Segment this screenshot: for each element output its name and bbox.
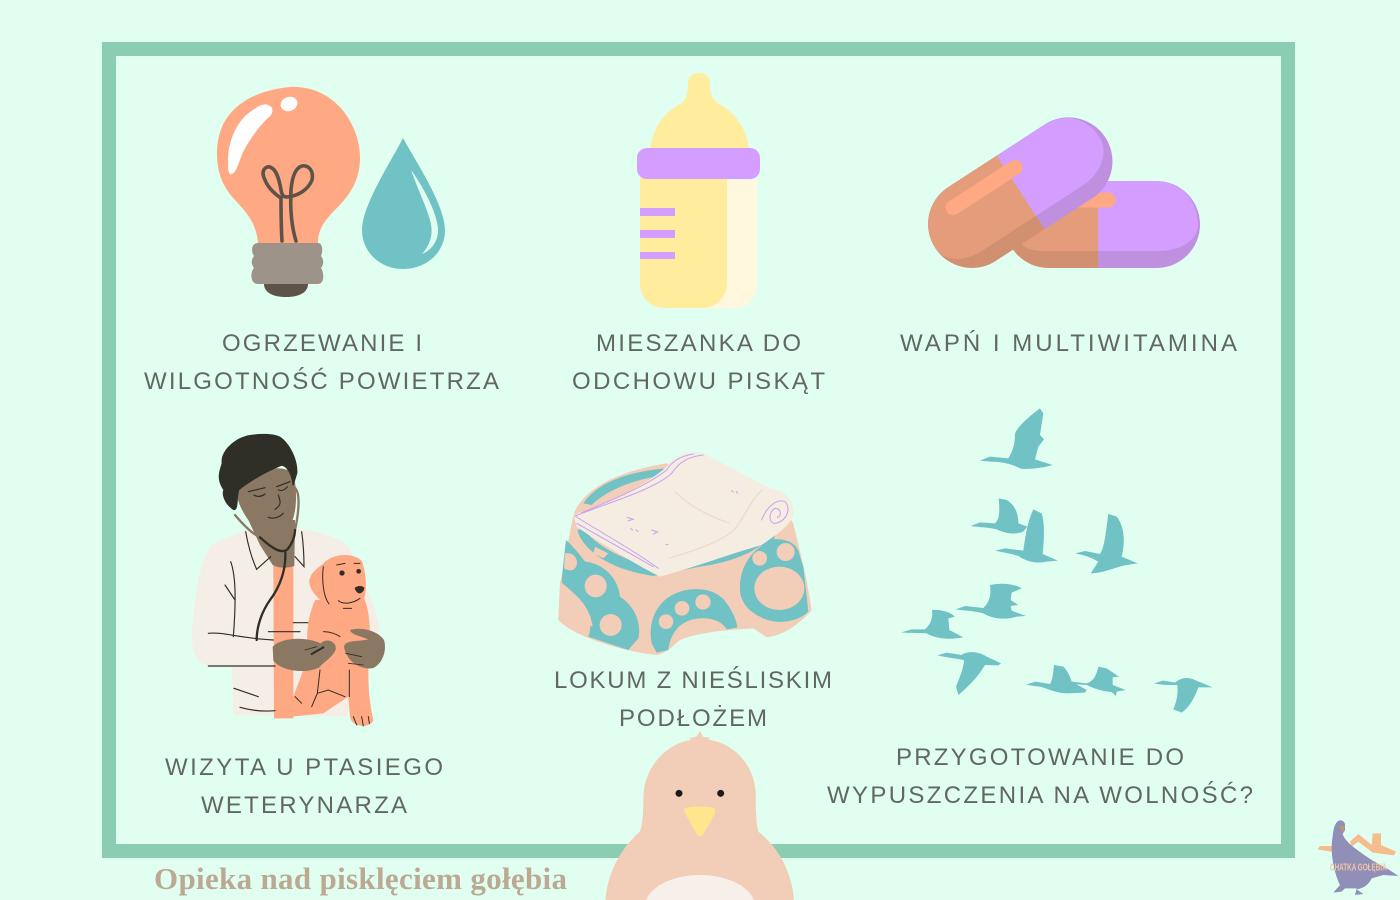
illustration: flock of birds <box>901 408 1213 713</box>
logo: pigeon and house <box>1317 820 1398 895</box>
illustration: vet with puppy <box>192 434 385 726</box>
label: calcium and multivitamin: WAPŃ I MULTIWITAMINA <box>900 330 1237 357</box>
icon: water drop <box>362 138 445 269</box>
illustration: bowl with towel <box>558 452 812 655</box>
label: non-slip bedding: PODŁOŻEM <box>619 705 767 732</box>
icon: baby bottle <box>637 73 760 308</box>
title: Opieka nad pisklęciem gołębia <box>154 861 568 896</box>
label: release preparation <box>827 744 1253 809</box>
icon: light bulb <box>217 87 360 297</box>
label: vet visit: WETERYNARZA <box>201 792 407 819</box>
label: heating and humidity <box>144 330 499 395</box>
green frame <box>109 49 1288 851</box>
label: release preparation: WYPUSZCZENIA NA WOLNOŚĆ? <box>827 781 1253 809</box>
icon: capsules <box>928 117 1200 268</box>
label: heating and humidity: WILGOTNOŚĆ POWIETRZA <box>144 367 499 395</box>
label: non-slip bedding: LOKUM Z NIEŚLISKIM <box>554 666 832 694</box>
illustration: chick <box>605 731 794 900</box>
label: vet visit <box>165 754 443 819</box>
label: formula: MIESZANKA DO <box>596 330 801 357</box>
label: non-slip bedding <box>554 666 832 732</box>
label: heating and humidity: OGRZEWANIE I <box>222 330 422 357</box>
label: vet visit: WIZYTA U PTASIEGO <box>165 754 443 781</box>
label: formula: ODCHOWU PISKĄT <box>572 368 825 395</box>
label: formula <box>572 330 825 395</box>
label: release preparation: PRZYGOTOWANIE DO <box>896 744 1184 771</box>
bird 1 <box>980 408 1053 469</box>
